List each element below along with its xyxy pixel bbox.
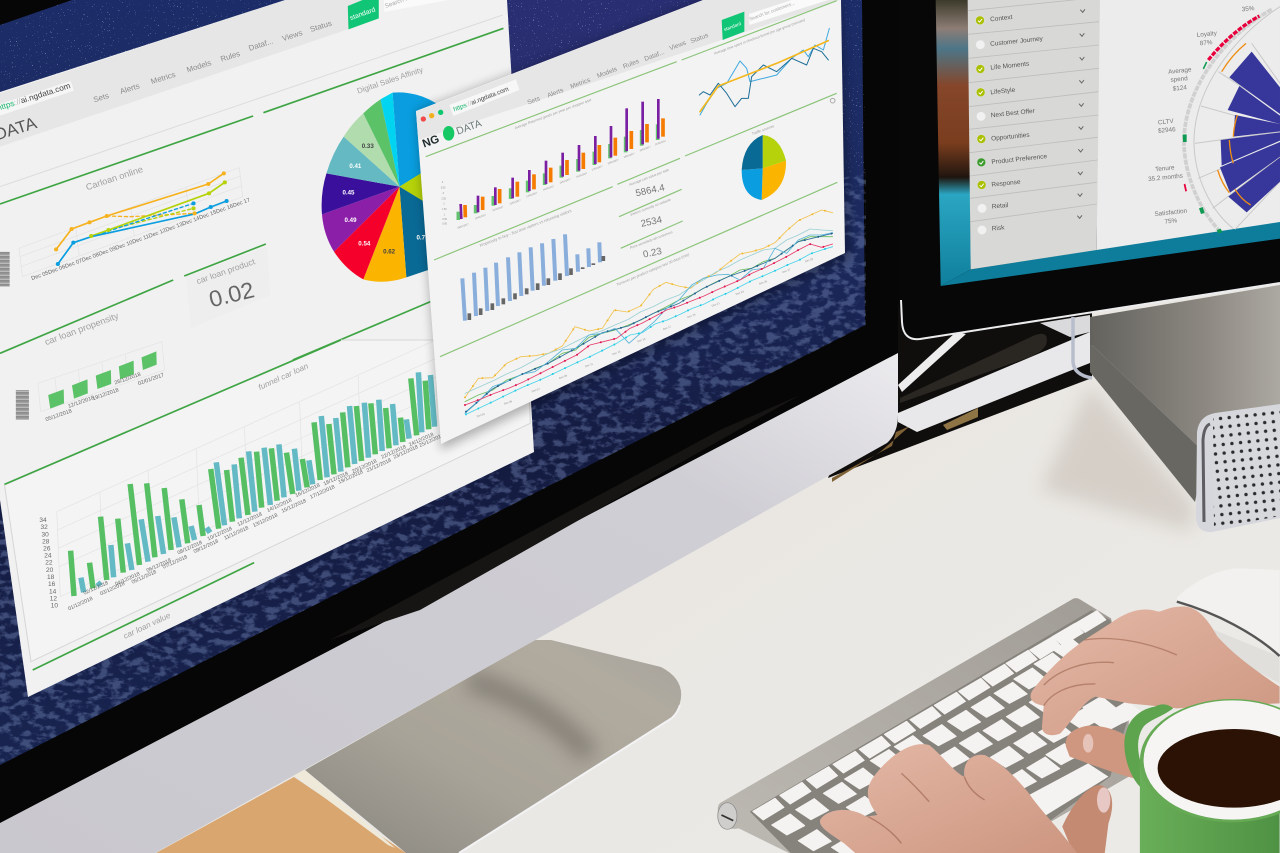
chart metric labels: $124 — [1172, 84, 1188, 93]
y axis: 28 — [42, 538, 50, 545]
date axis labels: Dec 27 — [782, 267, 791, 274]
card: traffic sources pie: Traffic sources — [751, 124, 775, 136]
standard button — [348, 0, 379, 29]
x axis dates: 25/12/2018 — [418, 433, 445, 449]
category labels: Risk — [991, 224, 1006, 233]
keyboard battery end cap — [718, 803, 737, 829]
x axis dates: 10/12/2018 — [207, 526, 233, 542]
navigation band — [0, 0, 379, 147]
chart metric labels — [1148, 5, 1255, 226]
brown reflections under the shelf — [943, 408, 978, 430]
card: visitors on website — [619, 189, 682, 230]
coffee — [1158, 729, 1280, 808]
card: car loan product value: 0.02 — [206, 277, 257, 312]
wireless keyboard with hands and mug — [718, 568, 1280, 853]
date axis labels: Dec 07 — [531, 387, 541, 393]
keys — [753, 611, 1142, 853]
y axis: 30 — [41, 531, 49, 538]
navigation menu: Models — [596, 66, 619, 80]
chart metric labels: CLTV — [1158, 118, 1175, 126]
category labels: Life Moments — [990, 61, 1030, 72]
x axis dates: 16/12/2018 — [294, 483, 321, 499]
x axis dates: 19/12/2018 — [337, 469, 364, 486]
card: digital sales affinity pie: 0.49 — [345, 217, 357, 224]
date labels: 11/01/2017 — [492, 206, 504, 212]
screen photo background — [936, 0, 971, 286]
x axis dates: 07/12/2018 — [162, 554, 189, 571]
date labels: 16/01/2017 — [576, 172, 588, 179]
navigation menu: Alerts — [119, 81, 141, 96]
mug handle — [1124, 704, 1173, 787]
tan paper under the stand — [156, 770, 406, 853]
date axis labels: Dec 05 — [503, 399, 513, 406]
y axis ticks: 3.50 — [441, 187, 446, 189]
content panel — [1097, 0, 1280, 250]
card: turnover multi-line chart — [440, 182, 837, 357]
y axis: 24 — [44, 553, 52, 560]
card: propensity to buy bars — [434, 187, 613, 321]
date labels: 14/01/2017 — [543, 185, 555, 192]
x axis dates: 08/12/2018 — [177, 540, 203, 556]
date labels — [458, 140, 667, 230]
screen wallpaper — [0, 0, 865, 765]
card: propensity to buy bars: Propensity to buy - first time visitors vs returning visitors — [479, 208, 572, 248]
category labels: Product Preference — [991, 153, 1048, 166]
card: average cart value: Average cart value per sale — [628, 168, 670, 187]
card: digital sales affinity pie: 0.62 — [383, 249, 396, 256]
purple sky glow — [507, 0, 740, 110]
category labels: Customer Journey — [990, 35, 1044, 48]
y axis ticks: 0.00 — [442, 223, 448, 225]
key bed — [750, 610, 1131, 853]
car loan value section — [33, 563, 254, 670]
chart metric labels: spend — [1170, 75, 1189, 84]
category labels: Response — [991, 179, 1021, 189]
date axis labels: Dec 15 — [637, 337, 646, 343]
monitor white rim — [901, 283, 1280, 339]
card: average cart value: 5864.4 — [635, 182, 666, 199]
x axis dates: 04/12/2018 — [114, 571, 141, 588]
radial score chart — [1148, 5, 1280, 233]
navigation menu — [526, 32, 710, 106]
line markers — [465, 210, 833, 414]
expand chevrons — [1077, 9, 1085, 218]
chart metric labels: $2946 — [1158, 126, 1176, 135]
x axis dates: 14/12/2018 — [266, 498, 293, 514]
small dashboard window shadow — [416, 0, 851, 450]
address bar — [0, 81, 74, 116]
date axis labels: Dec 21 — [711, 301, 721, 308]
window top bar — [416, 0, 840, 140]
y axis: 14 — [49, 588, 57, 595]
chart metric labels: Satisfaction — [1154, 208, 1188, 218]
card: traffic sources pie — [685, 93, 837, 200]
navigation menu: Status — [309, 19, 333, 34]
y axis: 26 — [43, 546, 51, 553]
navigation menu: Metrics — [150, 70, 177, 86]
orange bars — [465, 118, 663, 217]
y axis ticks: 4 — [442, 182, 444, 184]
navigation menu: Sets — [527, 95, 542, 106]
chart metric labels: 75% — [1164, 217, 1178, 226]
category labels: Opportunities — [991, 132, 1031, 143]
date labels: 13/01/2017 — [526, 192, 538, 198]
card: carloan online line chart — [0, 116, 253, 287]
chart metric labels: 35.2 months — [1148, 173, 1183, 183]
y axis ticks: 2 — [443, 204, 445, 206]
chart metric labels: Average — [1168, 66, 1192, 76]
grid — [57, 340, 437, 597]
card: average cart value — [617, 158, 680, 199]
x axis dates: 20/12/2018 — [351, 459, 378, 475]
chart metric labels: Loyalty — [1196, 30, 1218, 39]
card: checkout funnel line chart — [682, 1, 837, 115]
y axis ticks: 2.50 — [441, 198, 447, 200]
y axis ticks: 3 — [443, 193, 445, 195]
y axis: 22 — [45, 560, 53, 567]
y axis — [39, 517, 58, 610]
status circles — [976, 16, 986, 234]
monitor aluminium chin — [0, 350, 898, 853]
card: digital sales affinity pie: Digital Sales Affinity — [356, 65, 424, 95]
mug body — [1140, 763, 1280, 853]
coffee mug — [1124, 699, 1280, 853]
propensity bars chart: 05/12/2018 — [45, 408, 73, 423]
y axis ticks: 0.50 — [442, 219, 448, 221]
ngdata logo — [421, 118, 483, 150]
navigation menu: Rules — [622, 58, 641, 70]
card: carloan online line chart: Dec 05Dec 06Dec 07Dec 08Dec 09Dec 10Dec 11Dec 12Dec 13Dec 14Dec 15Dec 16Dec 17 — [31, 197, 251, 282]
x axis dates: 18/12/2018 — [323, 471, 349, 487]
navigation menu: Metrics — [569, 76, 592, 91]
address bar — [449, 79, 519, 116]
date labels: 19/01/2017 — [624, 153, 636, 159]
x axis dates: 12/12/2018 — [237, 512, 263, 528]
propensity bars chart: 19/12/2018 — [92, 387, 120, 402]
small dashboard window — [416, 0, 845, 444]
turnover line series with markers — [465, 210, 833, 418]
desk shadow near computer — [1040, 385, 1195, 532]
x axis dates: 13/12/2018 — [252, 513, 279, 529]
ngdata logo: DATA — [455, 118, 483, 138]
ngdata logo: NG — [421, 133, 441, 150]
mug rim — [1140, 699, 1280, 822]
x axis dates: 09/12/2018 — [193, 539, 220, 555]
category list panel — [968, 0, 1100, 269]
main monitor stand — [305, 640, 681, 853]
main monitor — [0, 0, 898, 853]
date axis labels: Dec 19 — [687, 312, 696, 319]
category labels: LifeStyle — [990, 87, 1016, 96]
card: visitors on website: Visitors currently on website — [629, 198, 671, 217]
large dashboard window — [0, 0, 534, 697]
left hand — [820, 744, 1112, 853]
date axis labels: Dec 23 — [735, 289, 745, 296]
navigation menu: Alerts — [546, 87, 565, 99]
card: price sensitivity — [621, 221, 683, 261]
dark device on the shelf — [900, 334, 1047, 403]
card: digital sales affinity pie: 0.45 — [342, 190, 355, 197]
date labels: 09/01/2017 — [458, 223, 470, 230]
propensity bars chart — [16, 342, 165, 423]
date axis labels — [476, 257, 814, 418]
card: visitors on website: 2534 — [640, 214, 664, 230]
date labels: 12/01/2017 — [510, 199, 522, 206]
x axis dates: 24/12/2018 — [408, 432, 435, 448]
date axis labels: Dec 17 — [662, 324, 672, 331]
y axis: 18 — [47, 574, 55, 581]
card: car loan product value — [184, 244, 270, 328]
y axis ticks: 1 — [444, 214, 446, 216]
monitor arm strut — [898, 332, 966, 392]
date axis labels: Dec 09 — [558, 373, 568, 380]
x axis dates: 02/12/2018 — [83, 580, 109, 597]
card: price sensitivity: 0.23 — [642, 246, 663, 261]
x axis dates: 06/12/2018 — [146, 558, 172, 574]
card: returned goods grouped bars — [426, 62, 677, 230]
y axis: 32 — [40, 524, 48, 531]
propensity bars chart: 26/12/2018 — [114, 372, 142, 386]
standard button: standard — [349, 7, 377, 22]
address bar: https://ai.ngdata.com — [452, 86, 510, 113]
heading: Carloan online — [84, 164, 144, 192]
x axis dates: 22/12/2018 — [380, 444, 407, 461]
x axis dates: 11/12/2018 — [223, 525, 250, 541]
card: digital sales affinity pie — [322, 65, 479, 282]
date labels: 15/01/2017 — [560, 178, 572, 185]
card: turnover multi-line chart: Turnover per product category last 30 days (mio) — [616, 253, 690, 287]
card: checkout funnel line chart: Average time spent in checkout funnel per age group (minutes) — [713, 18, 806, 56]
x axis dates: 23/12/2018 — [393, 444, 419, 461]
card: price sensitivity: Price sensitivity all customers — [629, 230, 673, 250]
date axis labels: Dec 29 — [804, 257, 814, 263]
mouse — [1166, 568, 1280, 683]
card: digital sales affinity pie: 0.54 — [358, 240, 371, 247]
x axis dates: 17/12/2018 — [309, 484, 336, 501]
date axis labels: Dec 02 — [476, 412, 486, 418]
category labels — [990, 14, 1048, 233]
navigation menu: Status — [690, 32, 710, 45]
background behind the monitors — [828, 300, 1092, 482]
white shelf — [898, 332, 1090, 432]
x axis dates: 15/12/2018 — [281, 498, 307, 515]
grey computer block behind the right monitor — [1090, 285, 1280, 502]
date labels: 20/01/2017 — [640, 146, 652, 152]
x axis dates: 03/12/2018 — [99, 581, 126, 597]
card: digital sales affinity pie: 0.33 — [362, 143, 374, 150]
card: digital sales affinity pie: 0.7 — [417, 234, 426, 241]
date axis labels: Dec 25 — [758, 279, 768, 286]
speaker grille — [1196, 404, 1280, 532]
traffic light buttons — [421, 110, 443, 122]
starry sky texture — [0, 0, 866, 172]
navigation menu: Views — [281, 28, 304, 43]
car loan value section: car loan value — [122, 611, 172, 641]
search box: Search for customers... — [749, 0, 796, 22]
chart metric labels: 35% — [1242, 5, 1255, 13]
right hand — [1031, 607, 1280, 778]
right monitor — [896, 0, 1280, 339]
x axis dates — [67, 432, 445, 612]
standard button: standard — [723, 21, 742, 32]
mountain texture — [0, 160, 870, 770]
category labels: Next Best Offer — [990, 108, 1036, 119]
navigation menu: Dataf... — [643, 49, 666, 63]
category labels: Context — [990, 14, 1013, 23]
date axis labels: Dec 11 — [584, 362, 594, 368]
date labels: 17/01/2017 — [592, 165, 604, 172]
y axis: 16 — [48, 581, 56, 588]
y axis: 12 — [50, 595, 57, 602]
x axis dates: 21/12/2018 — [366, 458, 393, 474]
monitor black bezel — [0, 0, 898, 823]
card: car loan product value: car loan product — [195, 256, 257, 286]
check marks — [978, 19, 984, 187]
search box — [749, 0, 833, 25]
date axis labels: Dec 13 — [612, 349, 621, 356]
propensity bars chart: 02/01/2017 — [137, 372, 165, 387]
y axis ticks: 1.50 — [442, 209, 447, 211]
heading: funnel car loan: funnel car loan — [257, 361, 310, 392]
funnel card background — [4, 340, 530, 662]
y axis: 20 — [46, 567, 54, 574]
navigation menu: Models — [185, 58, 213, 74]
date labels: 10/01/2017 — [475, 214, 487, 220]
teal series — [81, 372, 435, 592]
date labels: 21/01/2017 — [655, 140, 667, 146]
teal footer bar — [941, 221, 1280, 286]
chart metric labels: 87% — [1200, 39, 1213, 47]
funnel grouped bar chart — [39, 340, 445, 612]
keyboard reflection in bezel — [330, 395, 800, 640]
card: digital sales affinity pie: 0.41 — [349, 163, 362, 170]
y axis: 10 — [51, 603, 58, 610]
card: returned goods grouped bars: Average Returned goods per year per shopper type — [513, 98, 592, 131]
date labels: 18/01/2017 — [608, 159, 620, 165]
navigation menu: Views — [669, 39, 688, 52]
propensity bars chart: 12/12/2018 — [67, 395, 95, 410]
standard button — [722, 12, 744, 40]
navigation menu — [92, 19, 333, 104]
x axis dates: 05/12/2018 — [131, 569, 158, 586]
card heading: car loan propensity — [0, 280, 173, 353]
chart metric labels: Tenure — [1155, 164, 1175, 173]
x axis dates: 01/12/2018 — [67, 596, 94, 612]
navigation menu: Rules — [219, 49, 241, 64]
funnel card top rule — [4, 340, 341, 484]
navigation menu: Dataf... — [247, 37, 274, 53]
cable hook from monitor — [1073, 317, 1092, 378]
green series — [71, 378, 429, 596]
monitor bezel — [896, 0, 1280, 339]
green bars — [458, 124, 658, 220]
y axis ticks — [441, 182, 448, 225]
card heading: car loan propensity: car loan propensity — [43, 311, 120, 347]
y axis: 34 — [39, 517, 47, 524]
navigation menu: Sets — [92, 91, 110, 104]
keyboard body — [718, 598, 1129, 853]
category labels: Retail — [991, 202, 1009, 211]
purple bars — [461, 99, 658, 219]
